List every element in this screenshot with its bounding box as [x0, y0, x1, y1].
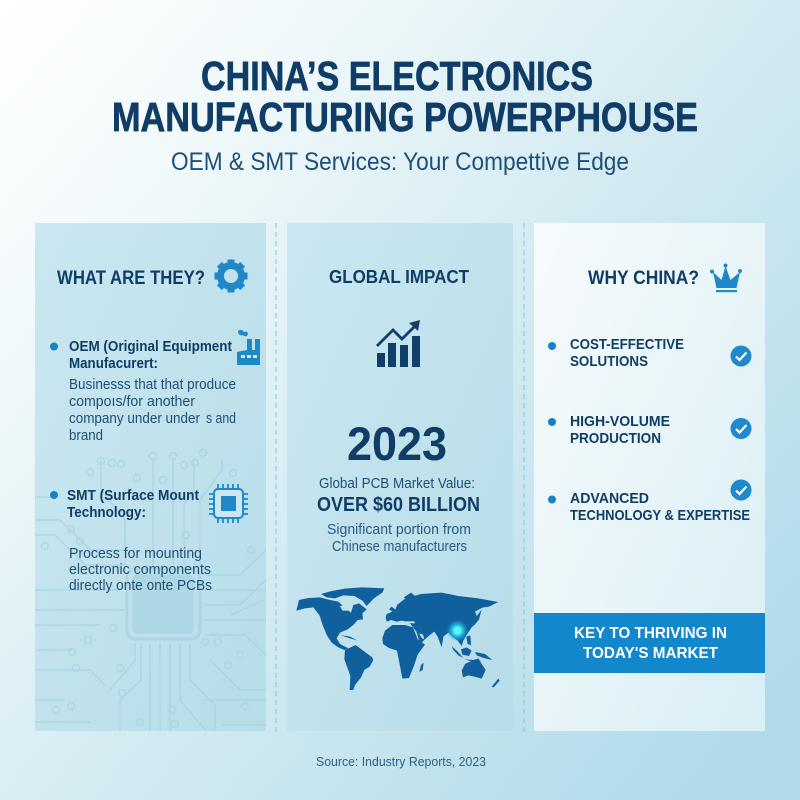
text: OEM description	[69, 377, 236, 444]
panel: what are they	[35, 223, 266, 731]
circuit board background	[35, 450, 266, 731]
title: CHINA’S ELECTRONICS	[201, 53, 593, 99]
text: OEM description: company under under	[69, 411, 200, 427]
world map	[296, 587, 500, 690]
bullet: OEM: OEM (Original Equipment	[69, 339, 232, 355]
stat: market value: OVER $60 BILLION	[317, 494, 480, 516]
south america	[344, 645, 373, 690]
text: OEM description: brand	[69, 428, 103, 444]
source: Source: Industry Reports, 2023	[316, 754, 486, 769]
dashed dividers	[276, 223, 524, 736]
australia	[462, 658, 486, 679]
africa	[382, 625, 425, 679]
text: SMT description: Process for mounting	[69, 546, 202, 562]
heading: global impact: GLOBAL IMPACT	[329, 266, 470, 287]
stat: market value	[317, 476, 480, 555]
stat: market value: Global PCB Market Value:	[319, 476, 475, 492]
list item: high-volume: PRODUCTION	[570, 430, 661, 447]
list item: advanced technology: TECHNOLOGY & EXPERTISE	[570, 507, 750, 524]
text: OEM description: compoıs/for another	[69, 394, 195, 410]
bullet: SMT	[50, 488, 199, 521]
heading: why china: WHY CHINA?	[588, 268, 699, 289]
text: SMT description	[69, 546, 212, 594]
icon: growth chart	[377, 320, 420, 367]
stat: year: 2023	[347, 417, 447, 470]
lakes and seas	[340, 605, 424, 639]
southeast asia islands	[452, 646, 463, 658]
callout: key to thriving: KEY TO THRIVING IN	[574, 625, 727, 642]
text: OEM description: Businesss that that produce	[69, 377, 236, 393]
panel: global impact	[287, 223, 513, 731]
bullet: OEM	[50, 339, 232, 372]
text: SMT description: electronic components	[69, 562, 211, 578]
north america	[296, 597, 367, 650]
title: MANUFACTURING POWERPHOUSE	[112, 94, 698, 140]
icon: gear	[208, 253, 254, 299]
list item: cost-effective: COST-EFFECTIVE	[570, 336, 684, 353]
stat: market value: Chinese manufacturers	[332, 539, 467, 555]
text: SMT description: directly onte onte PCBs	[69, 578, 212, 594]
new zealand	[492, 679, 500, 687]
bullet: SMT: Technology:	[67, 505, 146, 521]
subtitle: OEM & SMT Services: Your Compettive Edge	[171, 148, 629, 176]
arctic and greenland	[321, 587, 384, 606]
icon: factory	[237, 330, 260, 365]
stat: market value: Significant portion from	[327, 522, 471, 538]
list item: high-volume: HIGH-VOLUME	[570, 413, 670, 430]
callout: key to thriving	[534, 613, 765, 673]
title	[112, 53, 698, 140]
icon: crown	[710, 264, 742, 292]
list item: high-volume	[548, 413, 752, 447]
callout: key to thriving: TODAY'S MARKET	[583, 645, 718, 662]
panel: why china	[534, 223, 765, 731]
list item: advanced technology	[548, 480, 752, 524]
china highlight	[446, 620, 468, 642]
text: OEM description: s and	[206, 411, 236, 427]
madagascar	[419, 663, 424, 672]
bullet: SMT: SMT (Surface Mount	[67, 488, 199, 504]
list item: advanced technology: ADVANCED	[570, 490, 649, 507]
bullet: OEM: Manufacurert:	[69, 356, 158, 372]
eurasia	[386, 593, 498, 647]
list item: cost-effective: SOLUTIONS	[570, 353, 648, 370]
icon: chip	[209, 484, 248, 523]
heading: what are they: WHAT ARE THEY?	[57, 268, 205, 289]
list item: cost-effective	[548, 336, 752, 370]
